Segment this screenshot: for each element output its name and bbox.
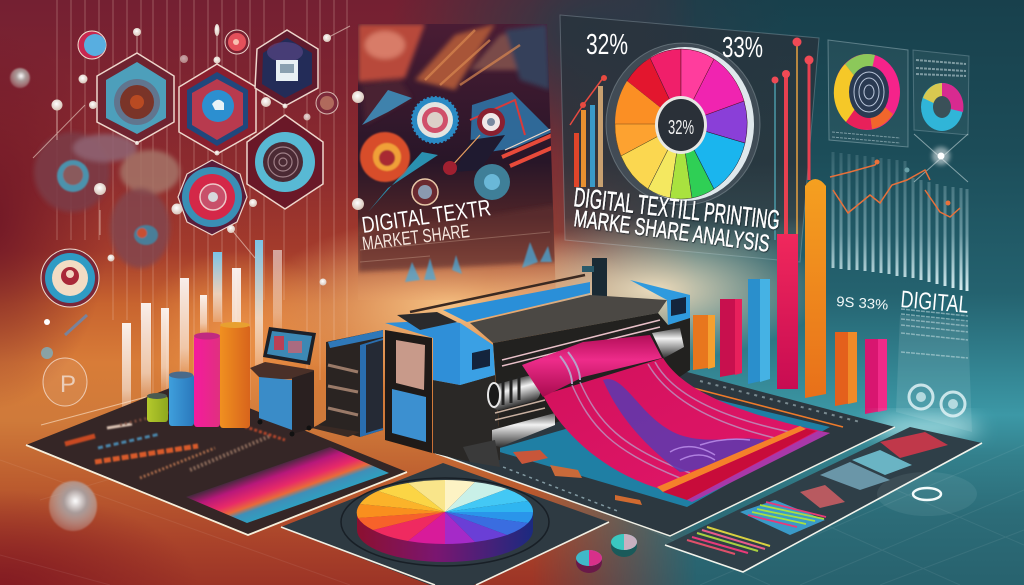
carriage — [582, 258, 607, 300]
title: digital textile printing market share analysis: DIGITAL TEXTILL PRINTING — [572, 182, 781, 235]
bar: tall crimson — [777, 234, 798, 389]
panel: pie chart mat — [281, 463, 637, 585]
light flare — [914, 134, 968, 182]
panel: central glass dashboard — [560, 15, 819, 262]
red streaks — [502, 134, 556, 166]
highlight stripes — [502, 320, 660, 366]
orange rule — [693, 388, 843, 427]
icon: ring two — [941, 392, 965, 416]
door frame — [385, 330, 432, 453]
silver floor sphere — [49, 481, 97, 531]
panel: right document strip — [665, 427, 982, 572]
icon: red hexagon with blue disc — [179, 64, 256, 154]
panel: art collage with title — [352, 24, 556, 300]
glass logo lens — [41, 315, 87, 406]
icon: navy hexagon with printer screen — [255, 30, 318, 106]
status display — [472, 349, 490, 370]
silver sphere top left — [10, 68, 30, 88]
rear blue block — [630, 280, 690, 325]
small donut chart — [921, 83, 963, 131]
orange cylinder — [220, 322, 250, 428]
bar: orange — [835, 332, 857, 406]
shelf cabinet — [312, 330, 383, 437]
colour swatch — [186, 447, 389, 523]
icon: target medallion — [41, 249, 99, 307]
mat thumbnails — [513, 450, 642, 505]
black body — [493, 313, 690, 440]
panel: printer mat — [435, 372, 895, 536]
green cylinder — [147, 393, 168, 422]
control panel lid — [397, 312, 457, 330]
glow behind right bars — [870, 418, 980, 438]
title: market share: MARKET SHARE — [361, 221, 471, 255]
blue shards — [362, 90, 412, 125]
icon: small colored sphere — [316, 92, 338, 114]
donut chart — [834, 54, 900, 130]
hexagon icon cluster — [10, 24, 350, 286]
cylinder bar chart — [147, 322, 250, 428]
lower roller — [492, 413, 555, 447]
large format textile printer — [385, 258, 830, 502]
thumbnail: pink lines — [800, 485, 845, 508]
bar chart: right 3D bars — [693, 179, 887, 414]
orange sun — [360, 132, 410, 182]
panel: striped line chart — [830, 152, 967, 291]
bar: blue — [748, 279, 770, 384]
orange streaks — [425, 30, 520, 85]
title: digital textile printing market share analysis — [572, 182, 781, 258]
glass logo lens: P — [60, 371, 76, 398]
small marker discs — [576, 534, 637, 573]
monitor — [263, 327, 316, 365]
striped roller end — [486, 374, 542, 412]
icon: red sphere — [225, 30, 249, 54]
icon: concentric pink hexagon — [178, 160, 247, 235]
panel: upper right donut card — [828, 40, 908, 147]
wall base line — [41, 397, 146, 425]
kiosk terminal — [250, 327, 316, 436]
small bar chart — [570, 75, 607, 187]
fabric border bands — [657, 426, 806, 492]
heading: digital: DIGITAL — [899, 286, 970, 319]
rear blue rail — [443, 282, 590, 322]
icon: ring one — [909, 385, 933, 409]
printed fabric — [543, 358, 830, 500]
pie wheel — [606, 43, 760, 205]
blurred fingerprint discs — [57, 160, 158, 245]
stat: 33 percent: 33% — [722, 32, 763, 64]
pink cylinder — [194, 332, 220, 427]
side dots — [352, 91, 364, 210]
fabric fringe — [687, 431, 830, 502]
thumbnail: blue grey — [820, 462, 890, 490]
pie centre value: 32% — [668, 117, 694, 139]
fabric roll — [522, 335, 662, 397]
panel: small donut card — [913, 50, 969, 135]
document thumbnails — [65, 410, 285, 478]
connector dots — [52, 24, 331, 286]
thumbnail: coloured stripes — [687, 527, 770, 554]
blue gear — [474, 164, 510, 200]
floor perspective lines — [0, 445, 1024, 585]
bar: crimson — [720, 299, 742, 377]
thumbnail: red textile — [880, 432, 948, 458]
thumbnail: teal — [852, 450, 912, 475]
blue marks on lower panel — [405, 242, 552, 282]
icon: teal fingerprint hexagon — [247, 115, 323, 209]
top grey surface — [470, 295, 667, 343]
wall grid lines — [57, 0, 347, 420]
3D pie chart — [357, 480, 533, 562]
gear ring — [412, 97, 458, 143]
title: digital text: DIGITAL TEXTR — [360, 194, 492, 238]
thumbnail: rainbow lines — [740, 500, 826, 535]
title: digital textile printing market share analysis: MARKE SHARE ANALYSIS — [572, 205, 771, 258]
status display rear — [671, 297, 686, 316]
blue cylinder — [169, 372, 194, 426]
blue front housing — [385, 320, 495, 385]
lower dark body — [433, 375, 500, 462]
bar: tall orange — [805, 179, 826, 398]
icon: blue pink sphere — [78, 31, 106, 59]
bar: magenta — [865, 339, 887, 414]
dark ring — [412, 179, 438, 205]
white bar chart on wall — [122, 240, 282, 418]
panel: left document with colour swatch — [26, 382, 407, 535]
top back bar — [410, 275, 585, 312]
blue mat area — [493, 393, 830, 507]
icon: blue fingerprint hexagon — [97, 53, 174, 143]
stat: 32 percent: 32% — [586, 29, 628, 61]
small red disc — [443, 161, 457, 175]
small gear ring — [477, 108, 505, 136]
connector lines — [33, 26, 350, 258]
fabric stripes — [572, 362, 790, 478]
right roller end — [652, 328, 684, 358]
fabric purple pattern — [603, 379, 765, 472]
stat: 33 percent: 9S 33% — [836, 293, 889, 313]
panel: right info card — [836, 286, 972, 432]
blurred fingerprint shapes — [34, 132, 180, 268]
tall thin indicator lines — [772, 38, 814, 240]
floor logo mark — [877, 472, 977, 516]
door window — [396, 340, 425, 390]
door blue panel — [392, 389, 426, 442]
bar: orange short — [693, 315, 715, 370]
